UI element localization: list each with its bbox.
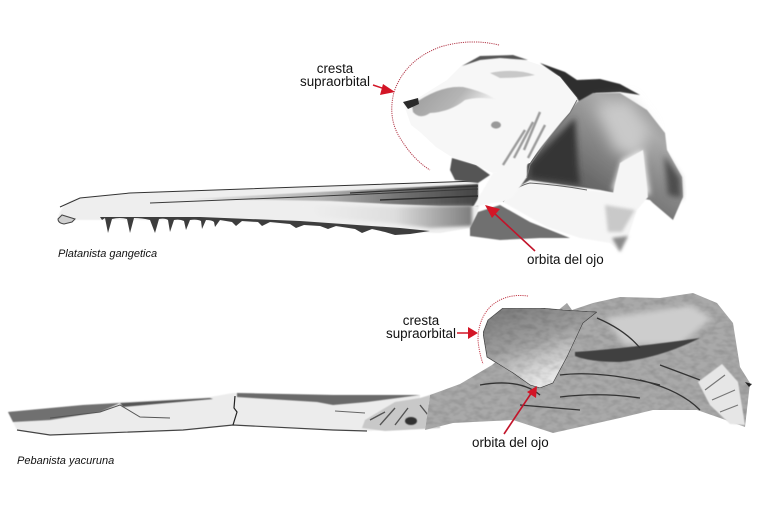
dark ridge behind crest — [540, 63, 640, 103]
arrow: upper crest — [373, 84, 395, 95]
rostrum — [58, 181, 480, 235]
arrow: lower crest — [457, 327, 478, 339]
supraorbital crest — [483, 308, 597, 388]
label: species Pebanista yacuruna: Pebanista yacuruna — [17, 455, 114, 467]
skull: Platanista gangetica — [58, 55, 683, 252]
label: orbita del ojo lower: orbita del ojo — [472, 435, 549, 450]
white zygomatic bar — [503, 150, 648, 252]
skull: Pebanista yacuruna — [8, 293, 752, 435]
label: cresta supraorbital upper: cresta — [317, 61, 354, 76]
label: cresta supraorbital upper: supraorbital — [300, 74, 370, 89]
dark bump under crest — [450, 158, 490, 183]
label: cresta supraorbital lower: cresta — [403, 313, 440, 328]
crest streaks — [503, 112, 545, 165]
braincase — [425, 293, 750, 433]
label: cresta supraorbital lower: supraorbital — [386, 326, 456, 341]
lower jaw area — [470, 205, 570, 240]
teeth and gum line — [100, 217, 430, 235]
rostrum — [8, 392, 440, 435]
label: species Platanista gangetica: Platanista gangetica — [58, 248, 157, 260]
supraorbital crest — [403, 55, 577, 177]
arrow: lower orbit — [504, 386, 537, 434]
label: orbita del ojo upper: orbita del ojo — [527, 252, 604, 267]
arrow: upper orbit — [485, 205, 535, 251]
braincase — [505, 93, 683, 220]
white orbital process — [473, 160, 527, 207]
curve: upper crest outline — [392, 42, 499, 170]
snout tip — [58, 215, 75, 224]
curve: lower crest outline — [478, 295, 528, 364]
